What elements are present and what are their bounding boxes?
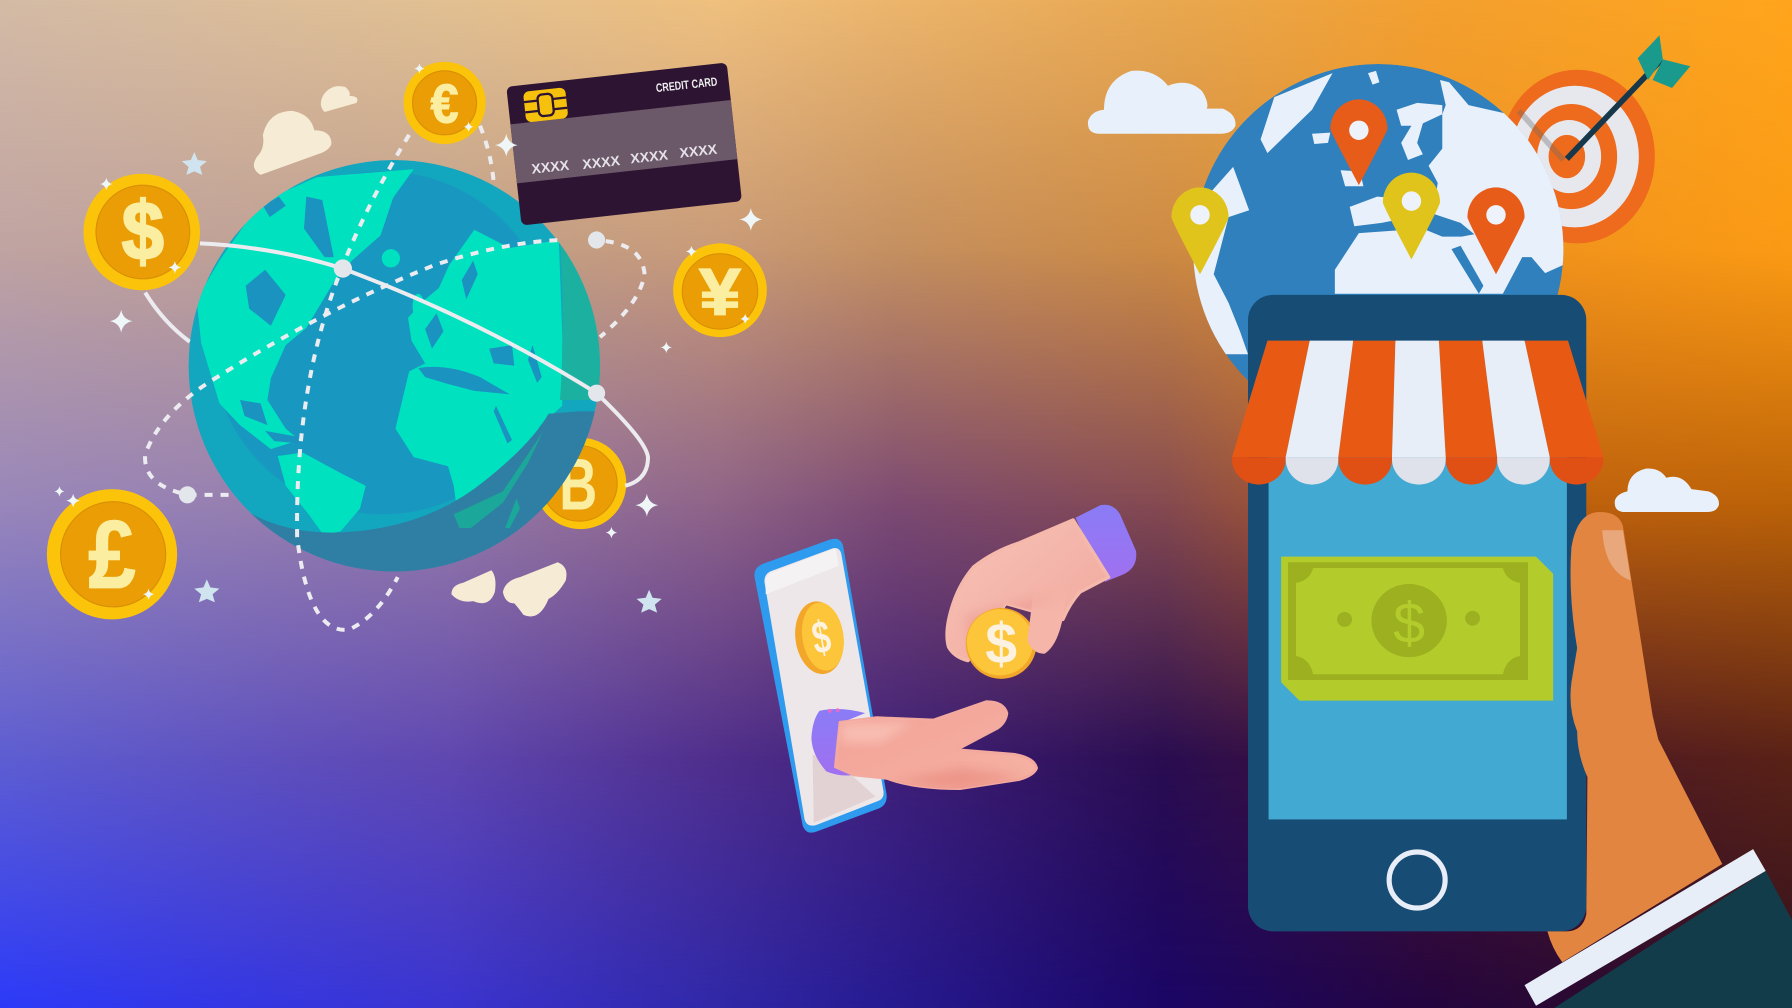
land: southern africa in shadow — [454, 432, 543, 528]
phone body — [755, 540, 886, 832]
group: mobile shop — [1088, 35, 1792, 1008]
sparkles — [54, 63, 762, 600]
land: south america — [278, 453, 366, 535]
cloud: small — [1615, 468, 1719, 512]
arrow — [1567, 35, 1690, 159]
cuff dots — [828, 708, 840, 713]
target — [1499, 70, 1655, 243]
coin: yen — [673, 243, 767, 337]
card number groups: XXXX — [679, 142, 719, 161]
credit card — [506, 63, 742, 225]
globe ocean: arabian sea — [1452, 246, 1522, 294]
card chip — [523, 87, 568, 123]
upper hand shading — [966, 599, 1032, 632]
held coin: $ — [985, 612, 1017, 676]
card number groups — [582, 142, 719, 172]
banknote — [1281, 557, 1553, 701]
world globe — [1194, 64, 1564, 380]
lower hand shading — [840, 722, 1029, 791]
pin: orange north — [1330, 99, 1387, 185]
phone top band — [766, 549, 839, 594]
coin: dollar — [83, 174, 200, 290]
coin: pound — [47, 489, 177, 619]
home button — [1389, 852, 1445, 908]
orbit: solid line — [200, 243, 648, 486]
card title: CREDIT CARD — [655, 74, 718, 95]
orbit: dashed meridian — [297, 126, 494, 630]
land: iceland — [382, 249, 400, 267]
group: world payments globe — [47, 62, 767, 630]
orbit: solid left segment — [145, 293, 190, 342]
card number groups: XXXX — [582, 153, 622, 172]
hand — [1525, 512, 1792, 1008]
inland seas — [418, 261, 542, 443]
land: north america — [197, 169, 414, 449]
globe land — [1189, 71, 1568, 354]
shop awning — [1232, 341, 1603, 485]
stars — [182, 152, 662, 613]
orbit: dashed equator — [145, 240, 645, 495]
lakes and bays — [240, 197, 334, 443]
coin: euro: € — [431, 73, 459, 135]
coin: bitcoin — [535, 438, 626, 529]
cloud: large — [1088, 71, 1236, 134]
clouds — [254, 86, 567, 616]
card number groups: XXXX — [630, 147, 670, 166]
shirt cuff — [1525, 849, 1766, 1006]
card number: XXXX — [531, 158, 571, 177]
thumbnail — [1602, 530, 1631, 581]
land: uk — [412, 294, 423, 312]
coin: yen: ¥ — [699, 254, 741, 328]
phone shade — [813, 754, 875, 823]
upper hand thumb — [1027, 585, 1066, 654]
coin: euro — [403, 62, 486, 144]
globe — [189, 160, 606, 594]
phone coin: $ — [808, 611, 835, 664]
banknote: $ — [1393, 591, 1425, 655]
phone coin — [791, 598, 848, 677]
pin: orange east — [1467, 187, 1525, 274]
upper hand — [947, 505, 1136, 679]
phone screen — [764, 548, 884, 826]
smartphone body — [1248, 295, 1586, 931]
coin: pound: £ — [89, 501, 135, 609]
held coin — [966, 608, 1037, 679]
smartphone screen — [1269, 343, 1567, 819]
land: eurasia and africa — [395, 230, 562, 528]
lower hand — [811, 702, 1037, 791]
group: mobile payment hands — [755, 505, 1136, 832]
globe bottom shadow — [251, 411, 595, 572]
orbit nodes — [179, 231, 605, 503]
pin: yellow west — [1171, 187, 1229, 274]
jacket sleeve — [1554, 871, 1792, 1008]
globe right crescent — [560, 244, 600, 400]
coin: bitcoin: B — [559, 443, 597, 526]
pin: yellow centre — [1383, 173, 1440, 259]
coin: dollar: $ — [122, 184, 164, 277]
